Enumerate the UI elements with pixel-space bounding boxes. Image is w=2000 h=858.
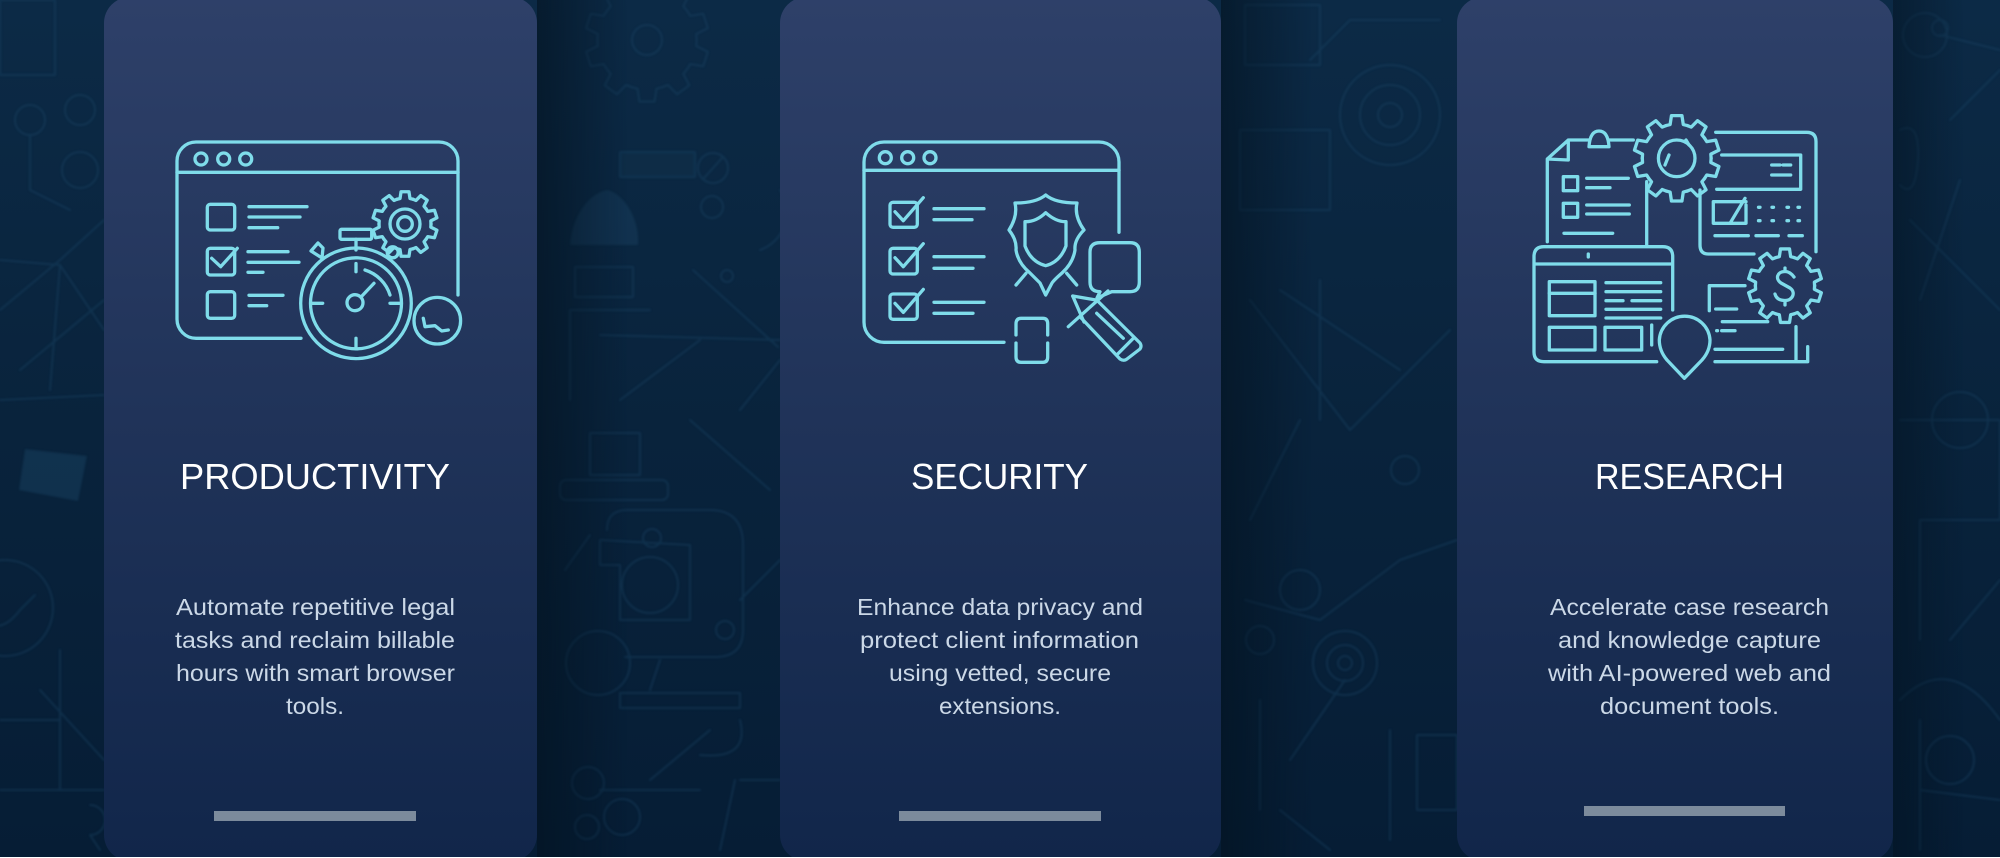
accent bar bbox=[214, 811, 416, 821]
left column art bbox=[19, 449, 87, 501]
gap one upper right art bbox=[740, 190, 787, 600]
description: security: extensions. bbox=[939, 693, 1061, 719]
icon: browser checklist with stopwatch and gear bbox=[177, 142, 461, 359]
panel: productivity bbox=[104, 0, 537, 858]
description: security: Enhance data privacy and bbox=[857, 594, 1143, 620]
description: productivity: tools. bbox=[286, 693, 344, 719]
description: research: with AI-powered web and bbox=[1547, 660, 1831, 686]
heading: productivity: PRODUCTIVITY bbox=[180, 456, 450, 497]
description: security: using vetted, secure bbox=[889, 660, 1111, 686]
right column art bbox=[1903, 13, 1947, 57]
description: productivity: Automate repetitive legal bbox=[176, 594, 455, 620]
description: productivity bbox=[175, 594, 455, 719]
gap two art bbox=[1340, 65, 1440, 165]
heading: research: RESEARCH bbox=[1595, 456, 1784, 497]
description: research: and knowledge capture bbox=[1558, 627, 1821, 653]
icon: documents, gears and location pin bbox=[1534, 116, 1823, 378]
description: productivity: hours with smart browser bbox=[176, 660, 455, 686]
description: security bbox=[857, 594, 1143, 719]
icon: browser checklist with shield and pencil bbox=[864, 142, 1141, 362]
description: research bbox=[1547, 594, 1831, 719]
heading: security: SECURITY bbox=[911, 456, 1088, 497]
description: research: Accelerate case research bbox=[1550, 594, 1829, 620]
accent bar bbox=[1584, 806, 1785, 816]
description: security: protect client information bbox=[860, 627, 1139, 653]
card shadows bbox=[537, 0, 1963, 858]
accent bar bbox=[899, 811, 1101, 821]
description: research: document tools. bbox=[1600, 693, 1779, 719]
panel: research bbox=[1457, 0, 1893, 858]
panel: security bbox=[780, 0, 1221, 858]
description: productivity: tasks and reclaim billable bbox=[175, 627, 455, 653]
